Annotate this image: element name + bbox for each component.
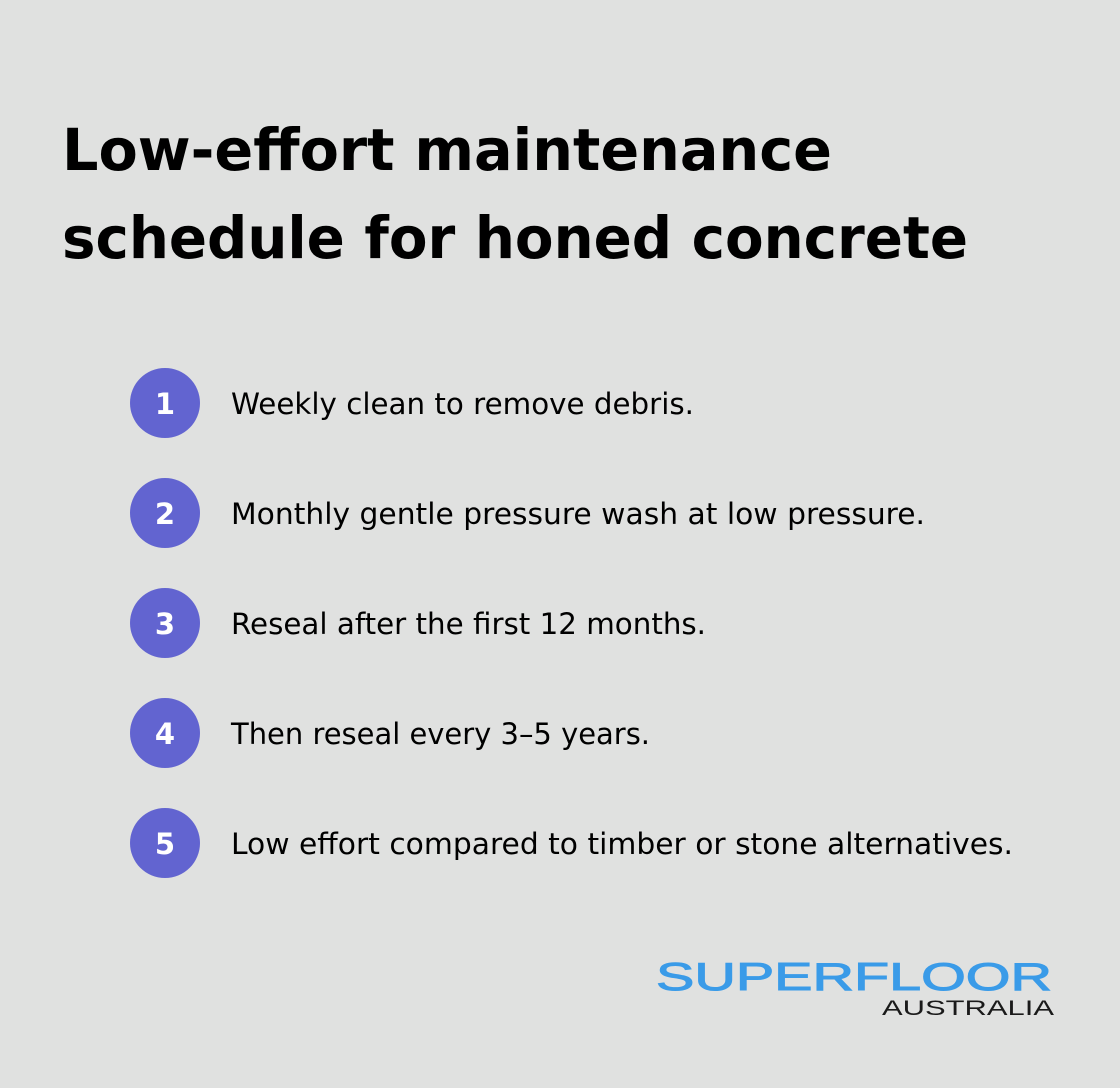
step 1: 1 <box>155 387 175 421</box>
step 5: Low effort compared to timber or stone alternatives. <box>231 827 1013 861</box>
step 4: Then reseal every 3–5 years. <box>230 717 650 751</box>
step 3: 3 <box>155 607 175 641</box>
logo: AUSTRALIA <box>882 997 1054 1020</box>
title: schedule for honed concrete <box>62 204 968 272</box>
title: Low-effort maintenance <box>62 116 832 184</box>
title <box>62 116 968 272</box>
step 3 <box>130 588 706 658</box>
step 5: 5 <box>155 827 175 861</box>
list of steps <box>130 368 1013 878</box>
step 2: Monthly gentle pressure wash at low pressure. <box>231 497 925 531</box>
step 3: Reseal after the first 12 months. <box>231 607 706 641</box>
step 4: 4 <box>155 717 175 751</box>
step 1 <box>130 368 694 438</box>
step 1: Weekly clean to remove debris. <box>231 387 694 421</box>
step 5 <box>130 808 1013 878</box>
step 2: 2 <box>155 497 175 531</box>
step 2 <box>130 478 925 548</box>
logo: SUPERFLOOR <box>656 956 1052 999</box>
logo <box>656 956 1054 1020</box>
step 4 <box>130 698 650 768</box>
